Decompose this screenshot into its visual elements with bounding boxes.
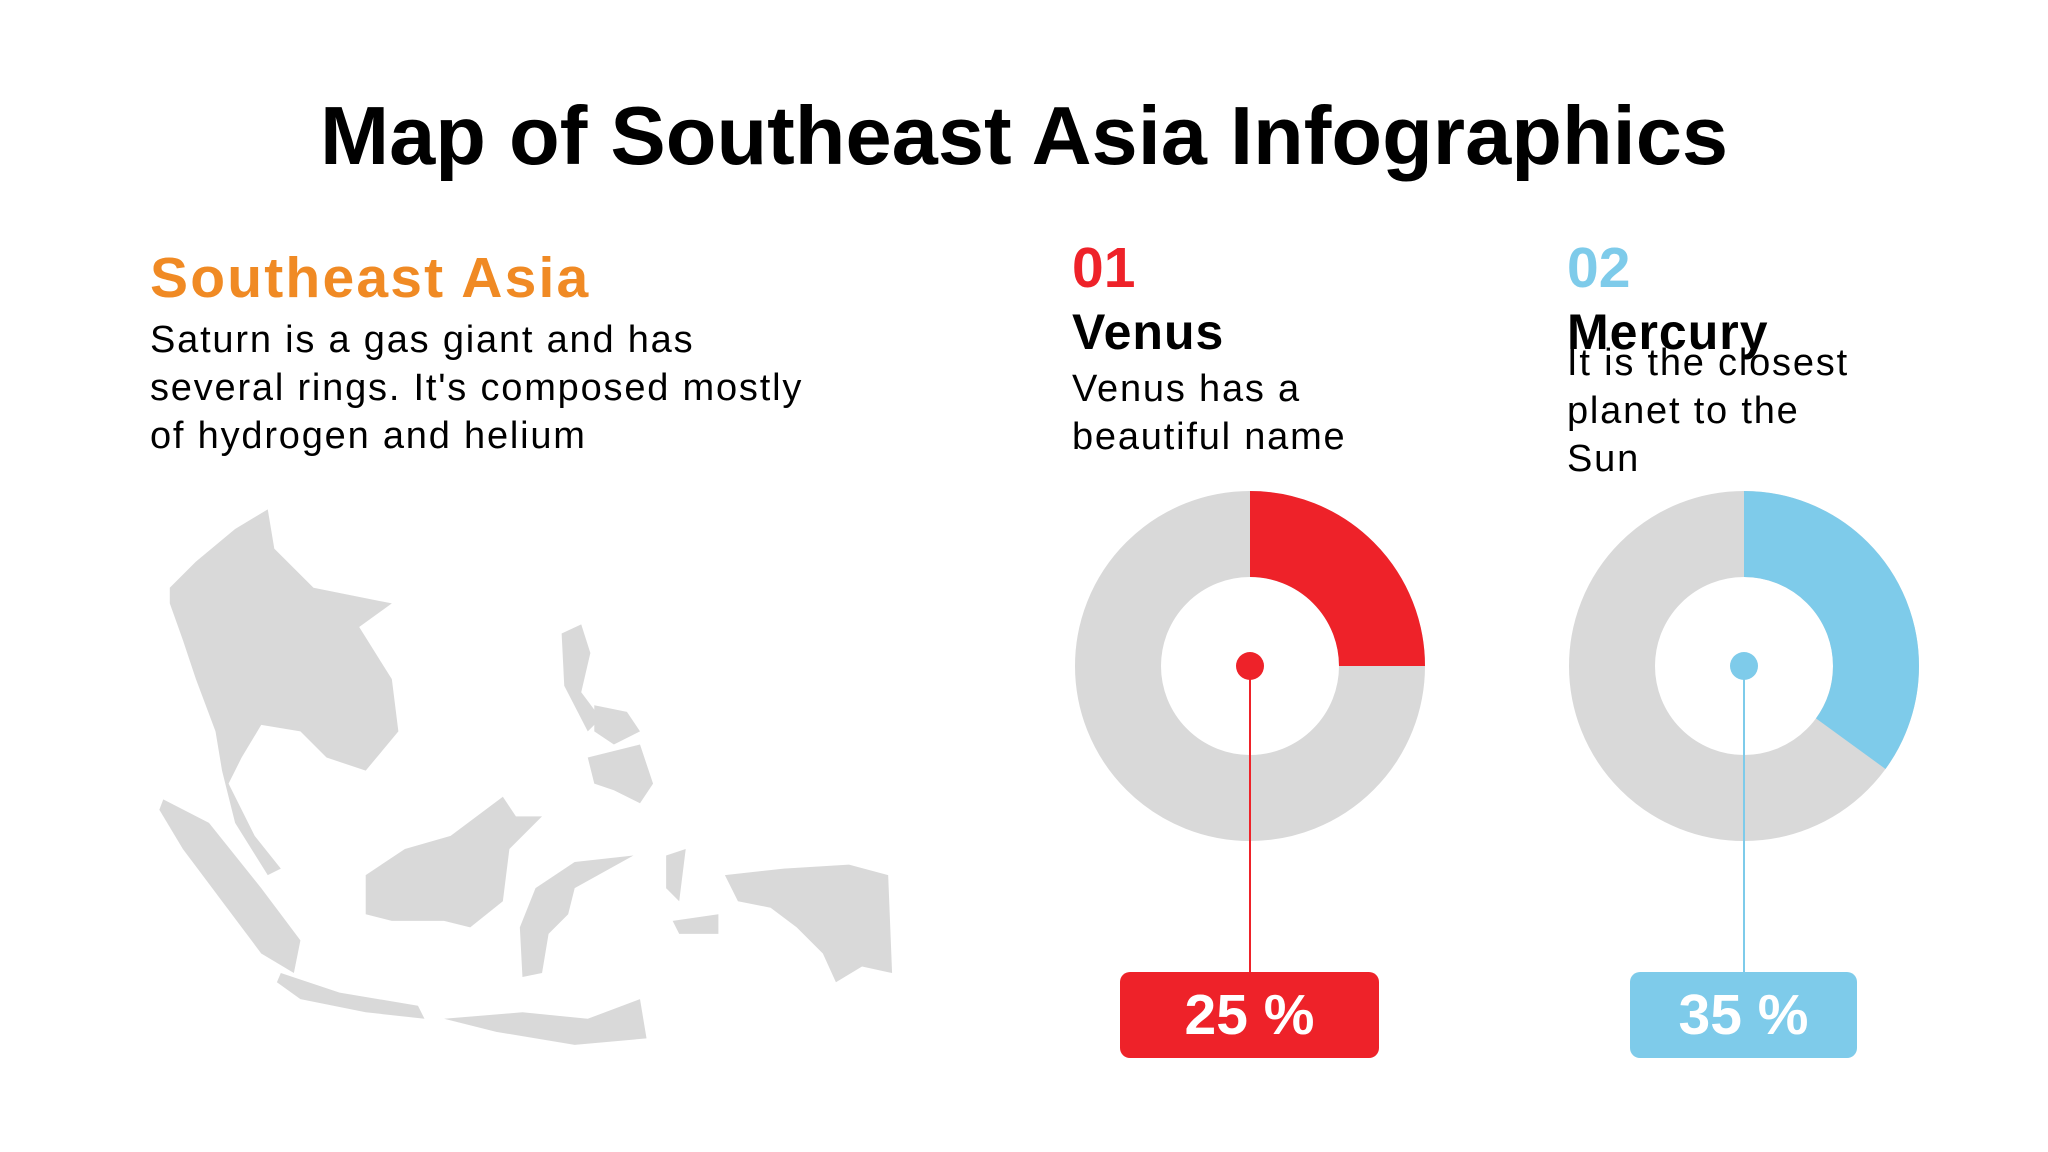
text block: description <box>150 319 803 457</box>
donut chart: Venus 25% <box>1075 491 1425 841</box>
text block: description: several rings. It's composed mostly <box>150 367 803 409</box>
text Mercury: planet to the <box>1567 390 1800 432</box>
text Mercury <box>1567 342 1849 480</box>
number 02: 02 <box>1567 236 1630 300</box>
text Venus: Venus has a <box>1072 368 1301 410</box>
label: 35%: 35 % <box>1679 983 1808 1047</box>
text block: description: Saturn is a gas giant and has <box>150 319 694 361</box>
text Venus <box>1072 368 1346 458</box>
text Mercury: It is the closest <box>1567 342 1849 384</box>
item 02: Mercury <box>1567 236 1849 480</box>
label: 35% <box>1630 972 1857 1058</box>
heading Mercury: Mercury <box>1567 304 1769 360</box>
number 01: 01 <box>1072 236 1135 300</box>
text block: description: of hydrogen and helium <box>150 415 587 457</box>
pointer: Mercury <box>1730 652 1758 972</box>
item 01: Venus <box>1072 236 1346 458</box>
text Mercury: Sun <box>1567 438 1640 480</box>
text Venus: beautiful name <box>1072 416 1346 458</box>
pointer: Venus <box>1236 652 1264 972</box>
heading: Southeast Asia: Southeast Asia <box>150 246 590 310</box>
donut chart: Mercury 35% <box>1569 491 1919 841</box>
heading Venus: Venus <box>1072 304 1224 360</box>
label: 25%: 25 % <box>1185 983 1314 1047</box>
label: 25% <box>1120 972 1379 1058</box>
title: Map of Southeast Asia Infographics <box>320 89 1728 182</box>
